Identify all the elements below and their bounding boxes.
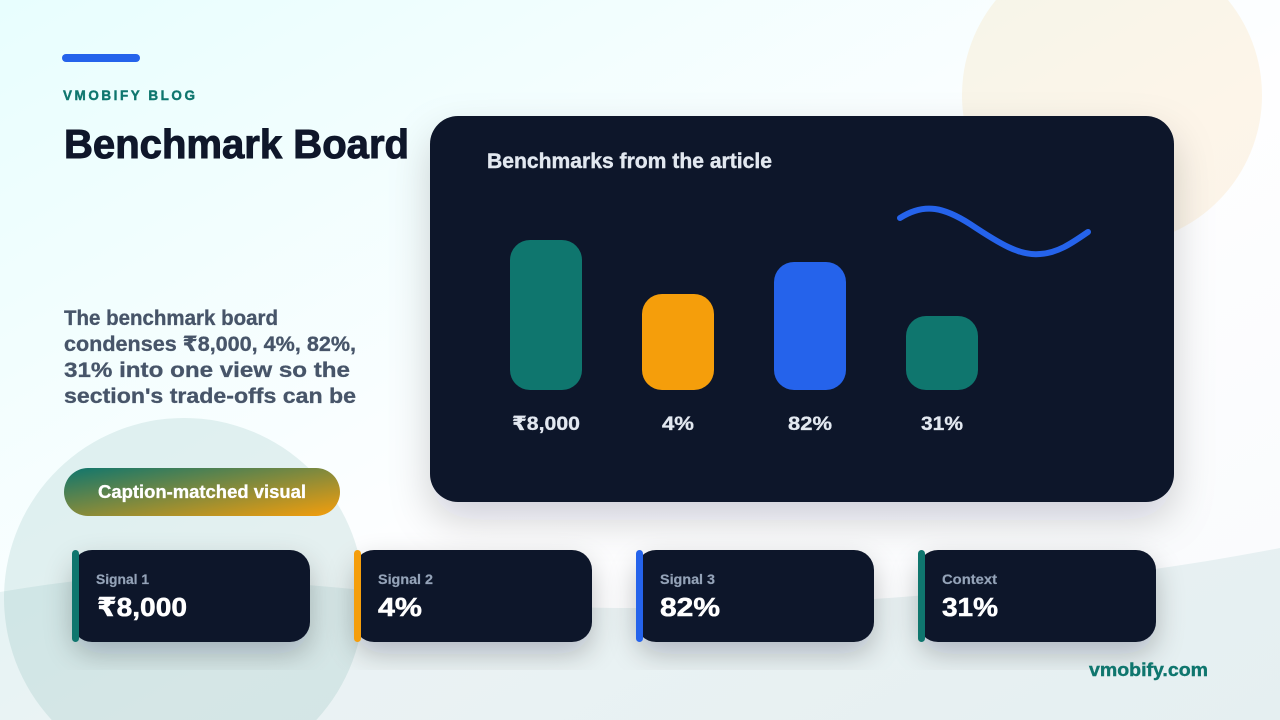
bar: 31%	[906, 316, 978, 390]
card: Context	[918, 550, 1156, 642]
bar labels: ₹8,000	[512, 413, 580, 435]
panel: benchmarks chart	[430, 116, 1174, 502]
body text	[64, 307, 356, 408]
caption pill: Caption-matched visual	[98, 482, 306, 502]
eyebrow label: VMOBIFY BLOG	[63, 88, 195, 103]
card: Signal 2: Signal 2	[378, 572, 433, 587]
body text: The benchmark board	[64, 307, 278, 330]
card: Signal 1: Signal 1	[96, 572, 150, 587]
accent bar	[62, 54, 140, 62]
body text: condenses ₹8,000, 4%, 82%,	[64, 333, 356, 356]
bar: ₹8,000	[510, 240, 582, 390]
footer url: vmobify.com	[1089, 659, 1208, 680]
card: Signal 1	[72, 550, 310, 642]
bar labels: 4%	[662, 413, 694, 435]
card: Context: Context	[942, 572, 998, 587]
card: Signal 3	[636, 550, 874, 642]
decorative bottom wave	[0, 548, 1280, 720]
card: Signal 3: 82%	[660, 592, 720, 622]
bar: 4%	[642, 294, 714, 390]
bar labels	[512, 413, 963, 435]
body text: section's trade-offs can be	[64, 385, 356, 408]
body text: 31% into one view so the	[64, 359, 350, 382]
bar labels: 82%	[788, 413, 832, 435]
title: Benchmark Board	[64, 121, 409, 167]
card: Signal 2	[354, 550, 592, 642]
decorative teal circle	[4, 418, 364, 720]
decorative amber circle	[962, 0, 1262, 245]
trend line	[900, 209, 1088, 254]
caption pill	[64, 468, 340, 516]
card: Signal 1: ₹8,000	[97, 592, 187, 622]
card: Signal 3: Signal 3	[660, 572, 716, 587]
bar labels: 31%	[921, 413, 963, 435]
panel heading: Benchmarks from the article	[487, 150, 772, 173]
bar: 82%	[774, 262, 846, 390]
card: Context: 31%	[942, 592, 998, 622]
card: Signal 2: 4%	[378, 592, 422, 622]
